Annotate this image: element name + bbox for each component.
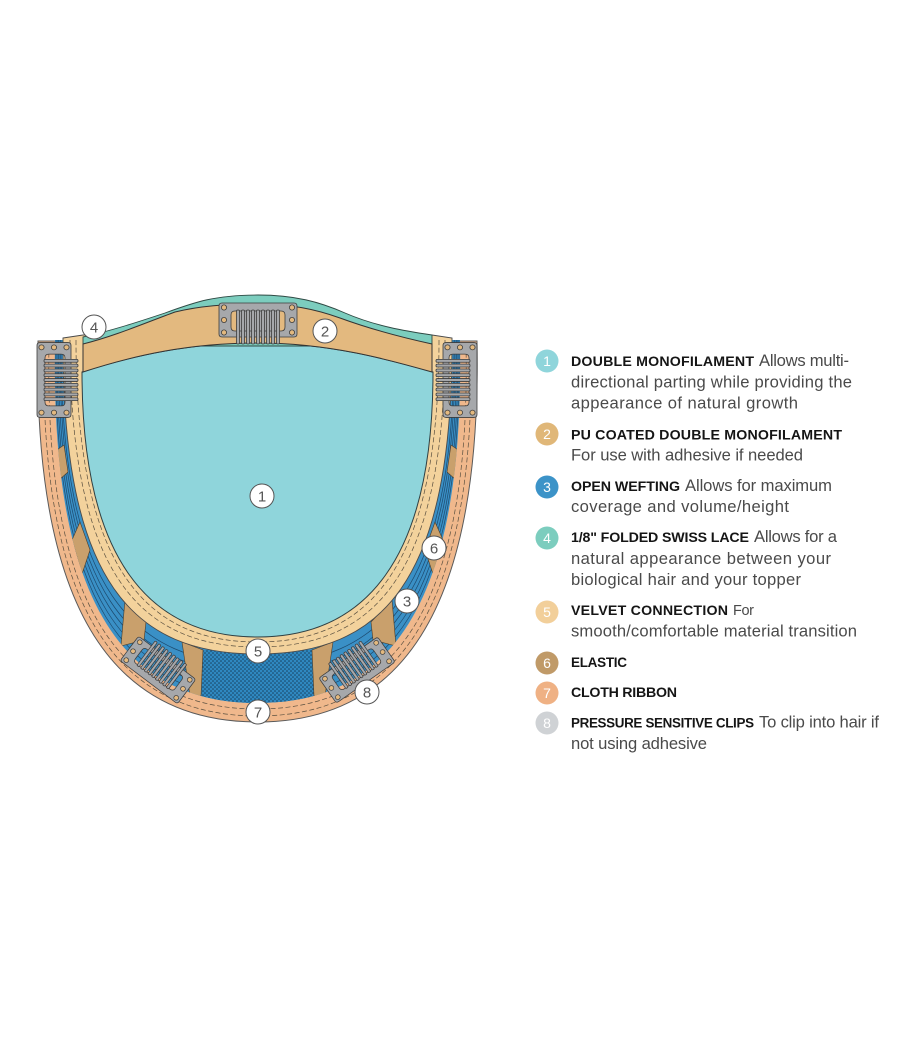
legend item 3: 3: [543, 479, 551, 495]
velvet connection band: [63, 335, 452, 654]
clip: left: [37, 343, 78, 417]
callout 6: 6: [430, 540, 438, 558]
callout 4: [82, 315, 106, 339]
legend item 4: [536, 526, 838, 589]
legend item 8: not using adhesive: [571, 734, 707, 753]
legend item 5: VELVET CONNECTION: [571, 603, 728, 619]
legend item 1: appearance of natural growth: [571, 394, 798, 412]
callout 8: 8: [363, 684, 371, 702]
legend item 1: directional parting while providing the: [571, 372, 852, 392]
diagram: topper base: [37, 295, 477, 724]
legend item 5: 5: [543, 604, 551, 620]
legend item 4: Allows for a: [754, 527, 838, 546]
legend item 2: 2: [543, 426, 551, 442]
legend item 5: [536, 600, 857, 640]
legend item 2: PU COATED DOUBLE MONOFILAMENT: [571, 428, 842, 444]
callout 2: [313, 319, 337, 343]
legend item 7: 7: [543, 685, 551, 701]
legend item 4: 1/8" FOLDED SWISS LACE: [571, 530, 749, 546]
legend: [536, 350, 879, 753]
legend item 5: smooth/comfortable material transition: [571, 622, 857, 640]
callout 2: 2: [321, 324, 329, 340]
legend item 8: To clip into hair if: [759, 712, 879, 732]
legend item 1: 1: [543, 353, 551, 369]
callout 7: 7: [254, 704, 262, 722]
legend item 2: For use with adhesive if needed: [571, 446, 803, 464]
cloth ribbon outer band: [38, 341, 477, 722]
callout 8: [355, 680, 379, 704]
legend item 1: [536, 350, 852, 412]
legend item 1: DOUBLE MONOFILAMENT: [571, 354, 754, 370]
PU coated band: [83, 304, 432, 372]
callout 5: [246, 639, 270, 663]
legend item 4: 4: [543, 530, 551, 546]
stitching: [44, 340, 471, 716]
legend item 4: biological hair and your topper: [571, 570, 801, 589]
open wefting band: [54, 340, 460, 703]
legend item 3: [536, 476, 832, 516]
legend item 3: OPEN WEFTING: [571, 479, 680, 495]
legend item 3: Allows for maximum: [685, 476, 832, 495]
legend item 7: [536, 682, 677, 704]
legend item 6: 6: [543, 655, 551, 671]
legend item 1: Allows multi-: [759, 351, 849, 370]
callout 5: 5: [254, 644, 262, 660]
clip: bottom left: [120, 631, 200, 704]
legend item 8: [536, 712, 879, 753]
legend item 2: [536, 422, 842, 464]
legend item 8: 8: [543, 715, 551, 731]
clip: top: [219, 303, 297, 344]
legend item 3: coverage and volume/height: [571, 497, 789, 516]
clip: right: [436, 343, 477, 417]
callout 6: [422, 536, 446, 560]
clip: bottom right: [315, 632, 395, 703]
callout 3: 3: [403, 594, 411, 610]
callout 1: [250, 484, 274, 508]
double monofilament cap: [82, 343, 433, 637]
callout 7: [246, 700, 270, 724]
callout 3: [395, 589, 419, 613]
folded swiss lace: [83, 295, 432, 346]
callout 1: 1: [258, 488, 266, 506]
legend item 6: ELASTIC: [571, 655, 627, 670]
legend item 5: For: [733, 603, 754, 619]
legend item 8: PRESSURE SENSITIVE CLIPS: [571, 716, 754, 730]
callout 4: 4: [90, 320, 98, 336]
legend item 7: CLOTH RIBBON: [571, 685, 677, 701]
legend item 6: [536, 652, 627, 674]
legend item 4: natural appearance between your: [571, 549, 831, 568]
